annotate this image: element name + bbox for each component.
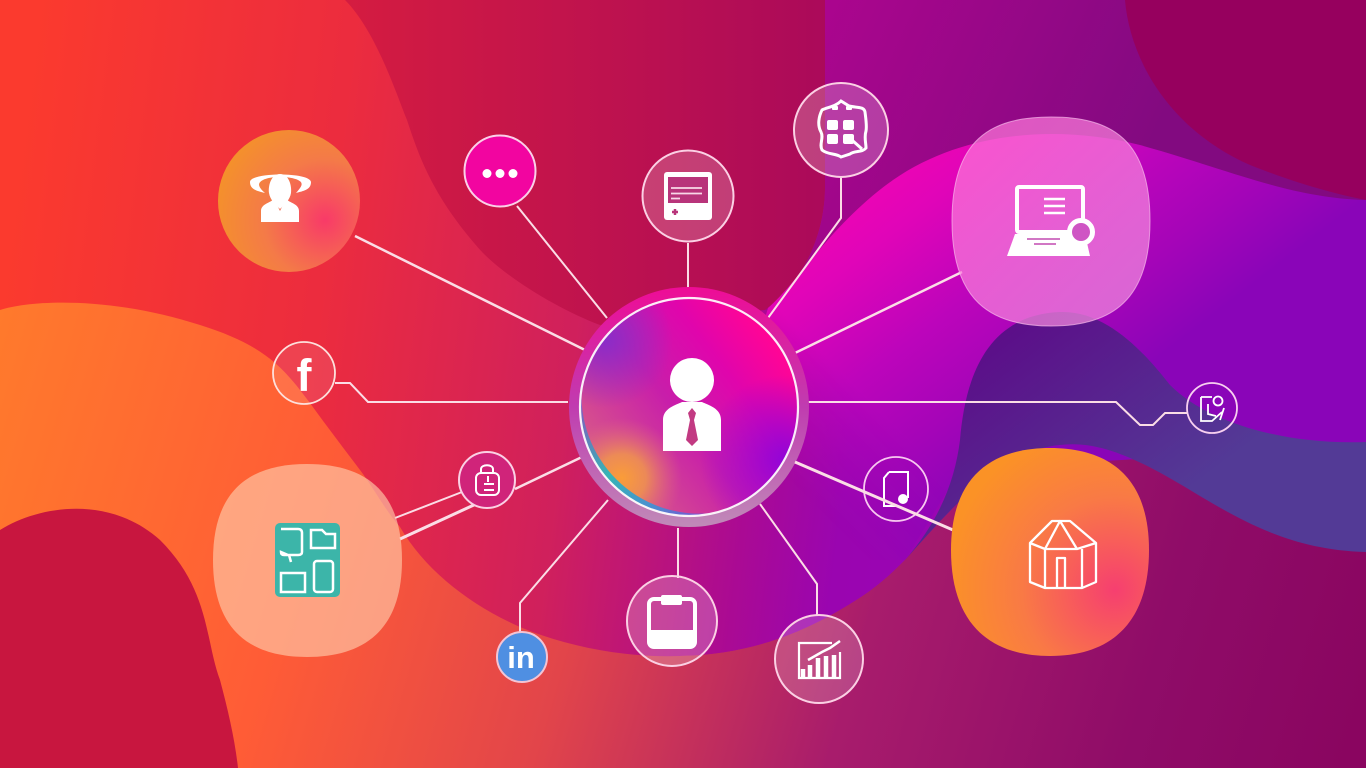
connector over music node: [795, 462, 953, 530]
icon: clipboard: [648, 595, 696, 648]
node: apps grid circle: [794, 83, 888, 177]
background: crimson top shape: [345, 0, 825, 325]
icon: laptop with webcam: [1007, 187, 1092, 256]
background: bright magenta wave: [766, 134, 1366, 508]
node: growth chart circle: [775, 615, 863, 703]
hub outer ring: [569, 287, 809, 527]
background: indigo wave: [905, 312, 1366, 560]
background: plum lower right shape: [680, 444, 1366, 768]
background: dark crimson corner shape: [0, 509, 238, 768]
node: music file circle: [864, 457, 928, 521]
background: dark magenta top right shape: [1125, 0, 1366, 200]
node: document card circle: [642, 150, 734, 242]
node: laptop glass panel: [952, 117, 1150, 326]
icon: apps grid blob: [819, 101, 866, 157]
connector lines: [335, 178, 1187, 632]
node: yurt orange panel: [951, 448, 1149, 656]
node: files glass panel: [213, 464, 402, 657]
icon: three dots: [482, 169, 518, 178]
icon: growth chart: [799, 641, 840, 678]
icon: person with halo: [250, 174, 311, 222]
hub disc: [580, 298, 798, 516]
node: clipboard circle: [627, 576, 717, 666]
node: orange person circle: [218, 130, 360, 272]
node: chat dots circle: [464, 136, 536, 206]
icon: person with tie: [663, 358, 721, 451]
icon: teal folders tile: [275, 523, 340, 597]
node: lock circle: [459, 452, 515, 508]
icon: linkedin letters: in: [507, 640, 535, 675]
central hub: [569, 287, 809, 527]
node: small tools circle: [1187, 383, 1237, 433]
icon: facebook letter: f: [296, 350, 312, 401]
icon: lock: [476, 465, 499, 495]
background: purple top shape: [765, 0, 1366, 310]
node: facebook circle: [273, 342, 335, 404]
icon: tools: [1201, 396, 1224, 421]
hub teal rim: [580, 385, 712, 515]
icon: document card: [664, 172, 712, 220]
node: linkedin circle: [497, 632, 547, 682]
icon: yurt tent: [1030, 521, 1096, 588]
icon: music file: [884, 472, 908, 506]
